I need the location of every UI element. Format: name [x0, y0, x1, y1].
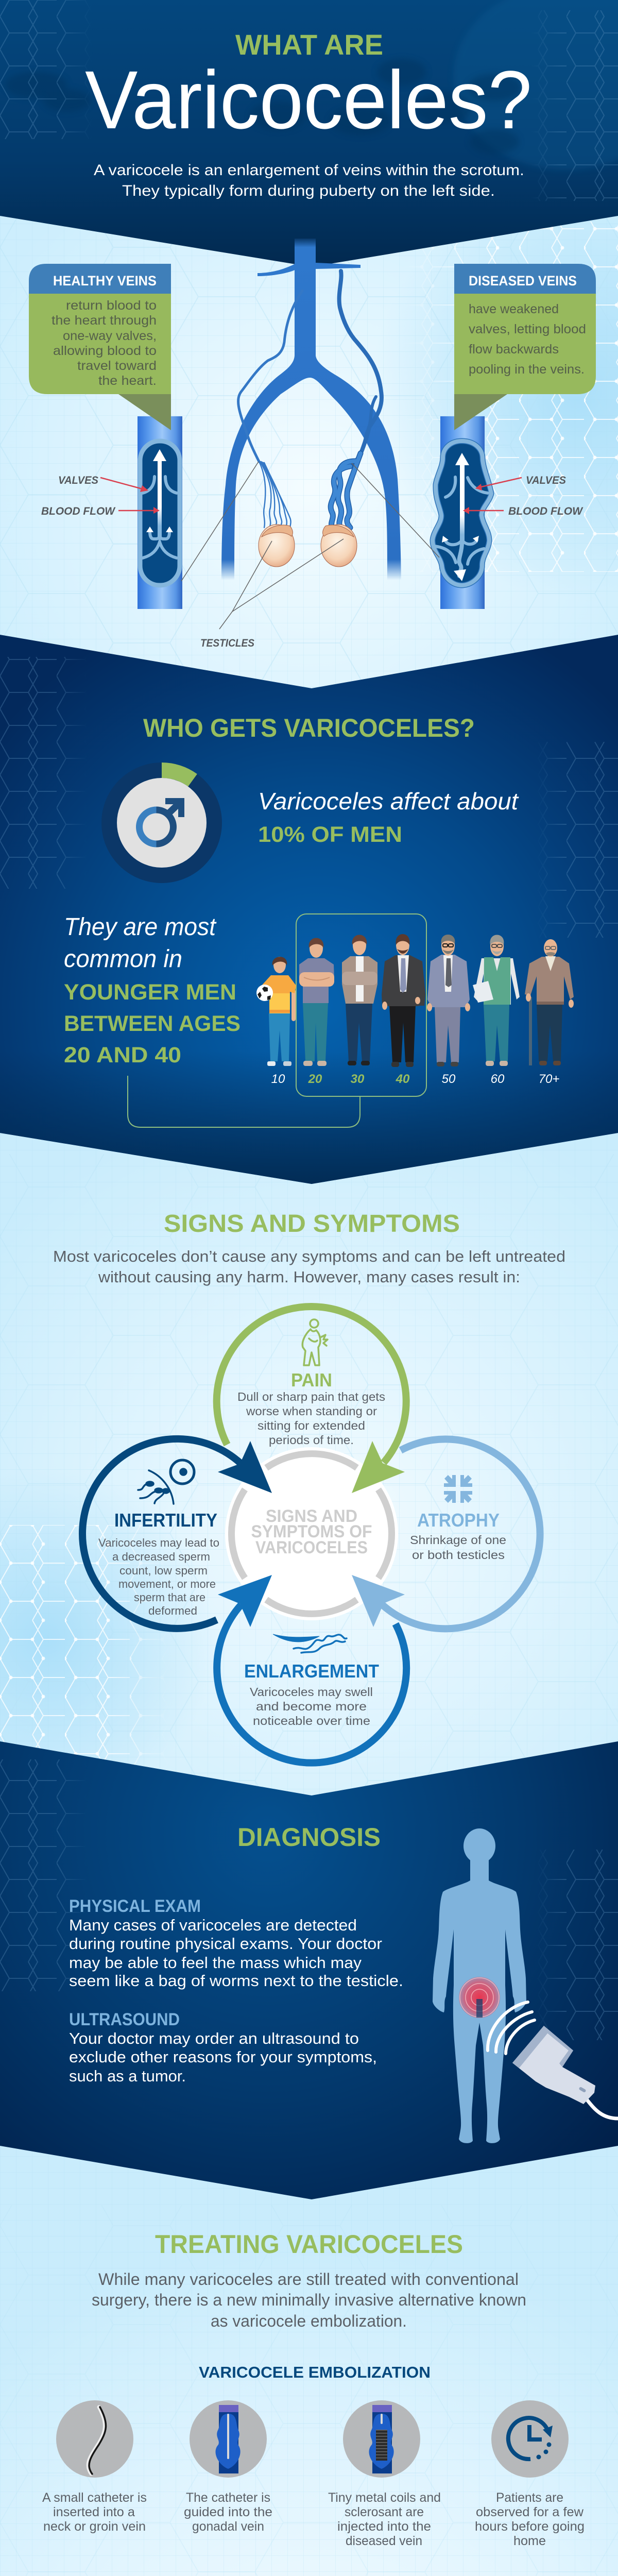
text: enlargement: and become more: [256, 1700, 367, 1713]
diagram: center hub: SIGNS AND: [266, 1506, 357, 1526]
heading: varicocele embolization: VARICOCELE EMBOLIZATION: [199, 2363, 431, 2381]
text: physical exam: PHYSICAL EXAM: [69, 1896, 201, 1916]
text: pain: PAIN: [291, 1369, 332, 1391]
icon: sperm and egg: [138, 1460, 194, 1504]
labels and red arrows: left vein: BLOOD FLOW: [41, 505, 116, 517]
testicles: [259, 524, 357, 567]
text: enlargement: [244, 1660, 379, 1727]
text: enlargement: ENLARGEMENT: [244, 1660, 379, 1682]
text: infertility: count, low sperm: [119, 1564, 208, 1577]
callout: healthy veins: [29, 264, 182, 609]
leader lines to testicles and veins: [181, 462, 439, 629]
intro paragraph: [94, 162, 524, 199]
person: age 60: [473, 935, 520, 1066]
text: infertility: a decreased sperm: [112, 1550, 210, 1563]
text: infertility: INFERTILITY: [114, 1510, 217, 1531]
person: age 20: [299, 938, 334, 1066]
text: physical exam: may be able to feel the mass which may: [69, 1954, 362, 1972]
text: physical exam: [69, 1896, 403, 1990]
text: infertility: Varicoceles may lead to: [98, 1536, 219, 1549]
text: ultrasound: [69, 2010, 377, 2085]
paragraph: treatment intro: [92, 2270, 526, 2330]
callout: healthy veins: the heart.: [98, 374, 157, 388]
text: varicoceles affect about 10 percent of men: [258, 788, 519, 847]
step 1: catheter inserted: [42, 2400, 147, 2534]
step 1: catheter inserted: inserted into a: [53, 2505, 135, 2519]
left gonadal vein: [238, 291, 302, 528]
text: pain: sitting for extended: [258, 1419, 365, 1432]
label: testicles: TESTICLES: [200, 637, 254, 649]
text: infertility: movement, or more: [118, 1578, 216, 1590]
title: Varicoceles?: Varicoceles?: [85, 54, 532, 146]
panel: diagnosis background: [0, 1741, 618, 2199]
intro paragraph: A varicocele is an enlargement of veins within the scrotum.: [94, 162, 524, 179]
text: most common in younger men: YOUNGER MEN: [64, 980, 236, 1005]
text: physical exam: Many cases of varicoceles are detected: [69, 1916, 357, 1934]
step 2: catheter guided: gonadal vein: [192, 2519, 264, 2534]
text: most common in younger men: BETWEEN AGES: [64, 1011, 241, 1036]
icon: atrophy inward arrows: [444, 1475, 472, 1503]
ring arrow: infertility: [82, 1439, 272, 1629]
paragraph: treatment intro: as varicocele embolization.: [211, 2312, 407, 2330]
text: infertility: [98, 1510, 219, 1617]
callout: diseased veins: DISEASED VEINS: [469, 273, 577, 289]
heading: who gets varicoceles: WHO GETS VARICOCELES?: [143, 714, 475, 742]
diagram: diseased vein valve: [433, 441, 491, 585]
text: physical exam: seem like a bag of worms next to the testicle.: [69, 1972, 403, 1990]
icon: swollen vein: [273, 1634, 347, 1653]
text: enlargement: noticeable over time: [253, 1714, 370, 1727]
ring arrow: enlargement: [217, 1575, 406, 1763]
callout: healthy veins: travel toward: [77, 359, 157, 373]
text: ultrasound: exclude other reasons for your symptoms,: [69, 2048, 377, 2066]
text: infertility: deformed: [148, 1604, 197, 1617]
text: pain: worse when standing or: [246, 1404, 377, 1418]
paragraph: signs and symptoms intro: without causing any harm. However, many cases result in:: [98, 1268, 520, 1286]
callout: diseased veins: pooling in the veins.: [469, 362, 585, 377]
title: what are: WHAT ARE: [235, 28, 383, 61]
callout: healthy veins: allowing blood to: [53, 344, 157, 358]
paragraph: treatment intro: surgery, there is a new minimally invasive alternative known: [92, 2291, 526, 2309]
age labels: 70+: [539, 1072, 559, 1086]
intro paragraph: They typically form during puberty on the left side.: [122, 182, 495, 199]
age labels: 60: [491, 1072, 505, 1086]
age labels: [271, 1072, 559, 1086]
chart: 10 percent donut with male symbol: [109, 770, 214, 875]
diagram: healthy vein valve: [138, 439, 182, 587]
text: physical exam: during routine physical exams. Your doctor: [69, 1935, 382, 1953]
callout: healthy veins: HEALTHY VEINS: [53, 273, 157, 289]
text: ultrasound: Your doctor may order an ultrasound to: [69, 2029, 359, 2047]
callout: healthy veins: the heart through: [52, 313, 157, 328]
person: age 30: [342, 935, 377, 1065]
diagram: center hub: SYMPTOMS OF: [251, 1522, 372, 1541]
callout: diseased veins: [440, 264, 596, 609]
step 1: catheter inserted: neck or groin vein: [43, 2519, 146, 2534]
step 2: catheter guided: [184, 2400, 272, 2534]
heading: treating varicoceles: TREATING VARICOCELES: [155, 2230, 463, 2259]
paragraph: signs and symptoms intro: Most varicoceles don’t cause any symptoms and can be left untreated: [53, 1247, 565, 1265]
main vein: [221, 239, 401, 580]
text: ultrasound: such as a tumor.: [69, 2067, 186, 2085]
text: most common in younger men: [64, 913, 241, 1067]
text: varicoceles affect about 10 percent of men: 10% OF MEN: [258, 822, 402, 847]
text: pain: Dull or sharp pain that gets: [237, 1390, 385, 1403]
panel: header background: [0, 0, 618, 267]
labels and red arrows: left vein: VALVES: [58, 474, 98, 486]
text: atrophy: ATROPHY: [417, 1510, 500, 1531]
heading: diagnosis: DIAGNOSIS: [237, 1823, 381, 1852]
age highlight bracket: [128, 914, 426, 1127]
step 2: catheter guided: guided into the: [184, 2505, 272, 2519]
diagram: center hub: [225, 1447, 398, 1620]
anatomy illustration: veins and testicles: [221, 239, 401, 580]
age labels: 40: [396, 1072, 410, 1086]
text: most common in younger men: 20 AND 40: [64, 1043, 181, 1067]
age labels: 20: [308, 1072, 322, 1086]
step 4: observed for a few hours: observed for a few: [476, 2505, 584, 2519]
heading: signs and symptoms: SIGNS AND SYMPTOMS: [164, 1210, 460, 1238]
paragraph: treatment intro: While many varicoceles are still treated with conventional: [98, 2270, 519, 2289]
text: enlargement: Varicoceles may swell: [250, 1685, 373, 1699]
labels and red arrows: right vein: VALVES: [526, 474, 566, 486]
callout: diseased veins: flow backwards: [469, 342, 559, 357]
text: pain: periods of time.: [269, 1433, 354, 1447]
labels and red arrows: left vein: [41, 474, 160, 517]
ring arrow: atrophy: [352, 1439, 540, 1629]
paragraph: signs and symptoms intro: [53, 1247, 565, 1286]
age labels: 30: [351, 1072, 365, 1086]
panel: who gets varicoceles background: [0, 635, 618, 1184]
text: atrophy: or both testicles: [412, 1548, 505, 1562]
step 4: observed for a few hours: home: [513, 2534, 546, 2548]
step 3: coils and sclerosant: injected into the: [337, 2519, 431, 2534]
illustration: ultrasound probe: [488, 2002, 618, 2119]
person: age 50: [427, 935, 470, 1066]
side branches: [258, 263, 360, 276]
step 4: observed for a few hours: [475, 2400, 585, 2548]
age labels: 10: [271, 1072, 285, 1086]
text: atrophy: Shrinkage of one: [410, 1533, 506, 1547]
text: most common in younger men: They are most: [64, 913, 217, 941]
step 3: coils and sclerosant: [328, 2400, 441, 2548]
labels and red arrows: right vein: BLOOD FLOW: [508, 505, 583, 517]
callout: diseased veins: have weakened: [469, 302, 559, 316]
callout: diseased veins: valves, letting blood: [469, 322, 586, 336]
callout: healthy veins: one-way valves,: [63, 329, 157, 343]
step 3: coils and sclerosant: Tiny metal coils and: [328, 2490, 441, 2505]
step 3: coils and sclerosant: diseased vein: [346, 2534, 422, 2548]
diagram: center hub: VARICOCELES: [255, 1538, 368, 1557]
right varicocele vein: [331, 271, 382, 528]
step 3: coils and sclerosant: sclerosant are: [345, 2505, 424, 2519]
person: age 70+: [525, 939, 574, 1065]
callout: healthy veins: return blood to: [66, 298, 157, 313]
icon: pain figure: [302, 1319, 328, 1365]
step 2: catheter guided: The catheter is: [186, 2490, 270, 2505]
person: age 40: [382, 934, 425, 1067]
age labels: 50: [442, 1072, 456, 1086]
text: pain: [237, 1369, 385, 1447]
ring arrow: pain: [217, 1307, 406, 1493]
people row: men by age: [256, 934, 574, 1067]
illustration: body silhouette with target: [433, 1828, 526, 2143]
text: most common in younger men: common in: [64, 945, 182, 973]
step 1: catheter inserted: A small catheter is: [42, 2490, 147, 2505]
text: ultrasound: ULTRASOUND: [69, 2010, 180, 2029]
text: atrophy: [410, 1510, 506, 1562]
text: varicoceles affect about 10 percent of men: Varicoceles affect about: [258, 788, 519, 815]
step 4: observed for a few hours: hours before going: [475, 2519, 585, 2534]
labels and red arrows: right vein: [463, 474, 583, 517]
step 4: observed for a few hours: Patients are: [496, 2490, 563, 2505]
text: infertility: sperm that are: [134, 1591, 205, 1604]
person: age 10: [256, 957, 296, 1066]
